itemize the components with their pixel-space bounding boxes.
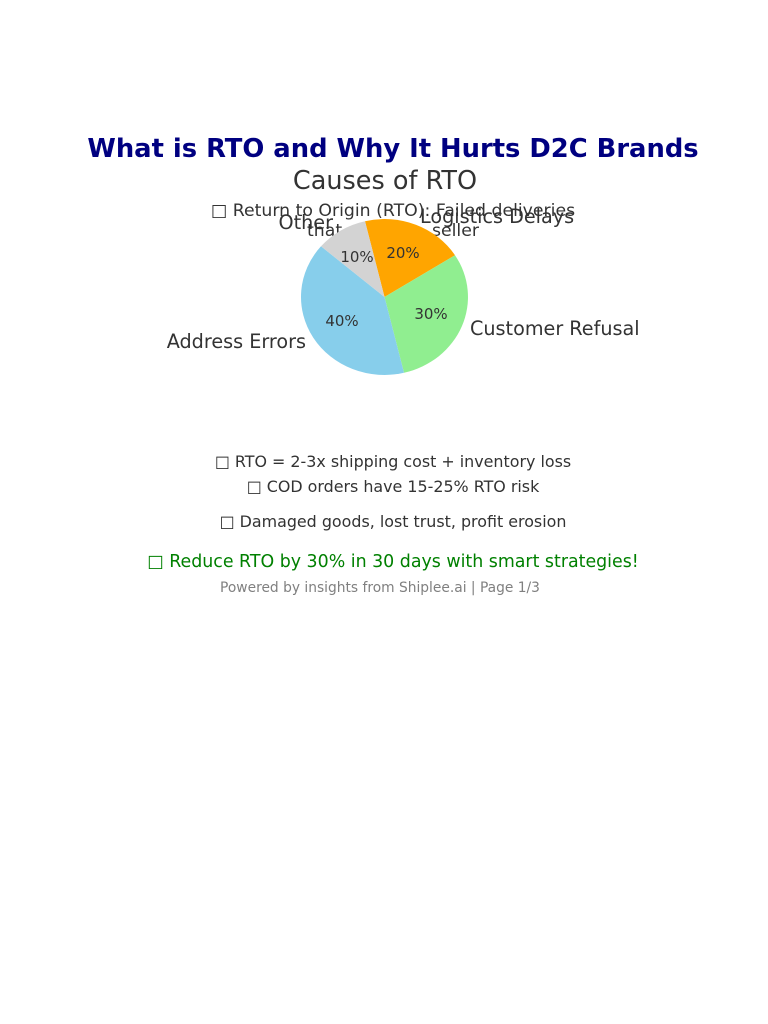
definition text (behind pie): □ Return to Origin (RTO): Failed deliveries [211, 201, 575, 221]
fact lines: □ COD orders have 15-25% RTO risk [247, 477, 539, 496]
call to action: □ Reduce RTO by 30% in 30 days with smart strategies! [147, 552, 639, 572]
impact line: □ Damaged goods, lost trust, profit erosion [220, 512, 566, 531]
pie chart: Logistics Delays [420, 205, 574, 228]
footer: Powered by insights from Shiplee.ai | Page 1/3 [220, 580, 540, 596]
title: What is RTO and Why It Hurts D2C Brands [87, 134, 699, 164]
pie chart: Address Errors [167, 330, 306, 353]
pie chart: 20% [386, 244, 420, 262]
pie chart: 10% [340, 248, 374, 266]
pie chart: 40% [325, 312, 359, 330]
pie chart: Other [279, 211, 333, 234]
fact lines [215, 452, 571, 496]
pie chart [166, 166, 640, 375]
fact lines: □ RTO = 2-3x shipping cost + inventory loss [215, 452, 571, 471]
definition continuation right: seller [432, 221, 479, 241]
pie chart: Causes of RTO [293, 166, 477, 196]
definition continuation: that [307, 221, 342, 241]
pie chart: Customer Refusal [470, 317, 640, 340]
pie chart: 30% [414, 305, 448, 323]
